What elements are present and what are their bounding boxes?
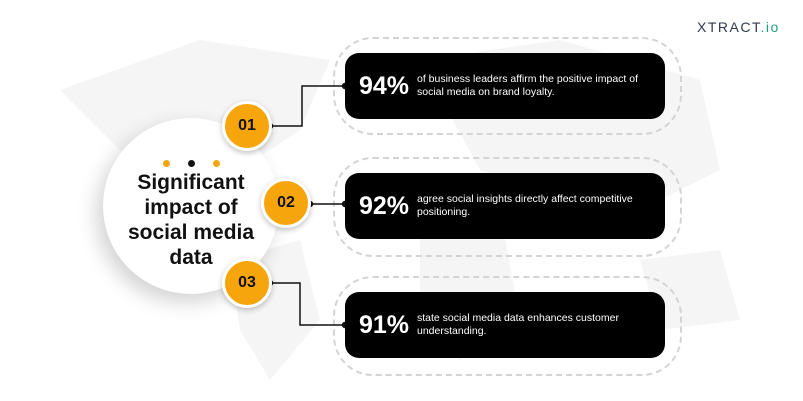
card 3: state social media data enhances customer — [417, 312, 619, 324]
badge 02: 02 — [277, 194, 295, 211]
card 1 — [345, 53, 665, 119]
card 2: 92% — [359, 192, 409, 220]
logo: XTRACT.io — [697, 19, 780, 35]
title text: data — [169, 246, 213, 269]
badge 02 — [261, 178, 311, 228]
card 1: of business leaders affirm the positive impact of — [417, 73, 638, 85]
dots — [163, 160, 220, 167]
card 1: social media on brand loyalty. — [417, 86, 555, 98]
badge 01 — [222, 101, 272, 151]
card 3: 91% — [359, 310, 409, 338]
card 1: 94% — [359, 72, 409, 100]
badge 01: 01 — [238, 117, 256, 134]
badge 03 — [222, 258, 272, 308]
title text: Significant — [137, 171, 245, 194]
card 2: agree social insights directly affect competitive — [417, 193, 633, 205]
title text: impact of — [144, 196, 238, 219]
main circle title — [103, 118, 279, 294]
card 3: understanding. — [417, 325, 486, 337]
dashed outlines — [333, 37, 682, 135]
card 3 — [345, 292, 665, 358]
title text: social media — [128, 221, 254, 244]
title text — [128, 171, 254, 269]
badge 03: 03 — [238, 274, 256, 291]
card 2 — [345, 173, 665, 239]
card 2: positioning. — [417, 206, 470, 218]
